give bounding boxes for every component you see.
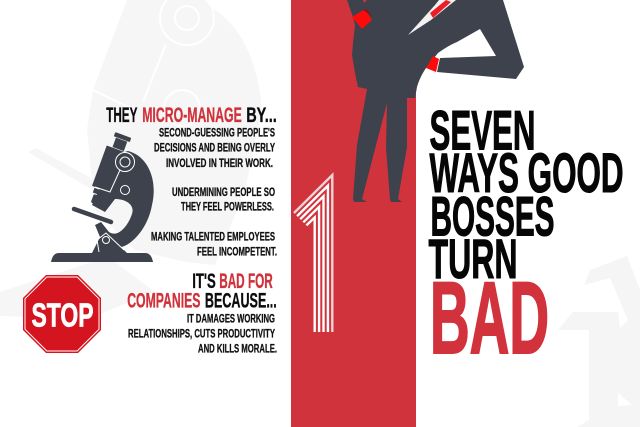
tie: [430, 0, 451, 18]
text block: micro-manage list: THEY FEEL POWERLESS.: [181, 200, 274, 214]
text block: micro-manage list: FEEL INCOMPETENT.: [197, 244, 277, 258]
heading: micro-manage: MICRO-MANAGE: [142, 102, 242, 127]
arm: [92, 151, 154, 253]
heading: micro-manage: [106, 102, 277, 127]
text block: company impact: AND KILLS MORALE.: [198, 342, 277, 356]
shirt collar: [408, 0, 456, 35]
heading: bad for companies: BAD FOR: [219, 268, 273, 293]
heading: bad for companies: COMPANIES: [127, 288, 200, 312]
text block: micro-manage list: UNDERMINING PEOPLE SO: [172, 185, 275, 199]
ghost microscope background: [0, 0, 262, 318]
left cuff: [352, 9, 372, 29]
title: [428, 98, 624, 375]
heading: micro-manage: BY...: [246, 102, 277, 127]
heading: bad for companies: IT'S: [192, 268, 216, 293]
white detail lines: [95, 152, 134, 252]
text block: micro-manage list: DECISIONS AND BEING OVERLY: [154, 140, 275, 154]
numeral one: [294, 175, 332, 332]
right cuff: [426, 56, 439, 72]
stop sign icon: [23, 275, 101, 353]
text block: micro-manage list: SECOND-GUESSING PEOPLE'S: [159, 126, 275, 140]
text block: company impact: IT DAMAGES WORKING: [187, 312, 275, 326]
heading: bad for companies: BECAUSE...: [205, 288, 277, 312]
base: [51, 253, 153, 262]
text block: micro-manage list: [151, 126, 277, 258]
heading: bad for companies: [127, 268, 277, 312]
heading: micro-manage: THEY: [106, 102, 138, 127]
red central band: [291, 0, 416, 427]
title: SEVEN: [430, 98, 536, 162]
text block: company impact: RELATIONSHIPS, CUTS PRODUCTIVITY: [128, 326, 275, 340]
stop sign icon: STOP: [32, 296, 94, 334]
stage: [74, 209, 111, 222]
tube: [87, 131, 135, 209]
title: TURN: [428, 227, 518, 290]
businessman figure: [347, 0, 524, 202]
ghost numeral background: [558, 256, 640, 427]
microscope icon: [51, 131, 154, 262]
text block: company impact: [128, 312, 277, 356]
text block: micro-manage list: MAKING TALENTED EMPLOYEES: [151, 230, 275, 244]
text block: micro-manage list: INVOLVED IN THEIR WORK.: [166, 156, 273, 170]
